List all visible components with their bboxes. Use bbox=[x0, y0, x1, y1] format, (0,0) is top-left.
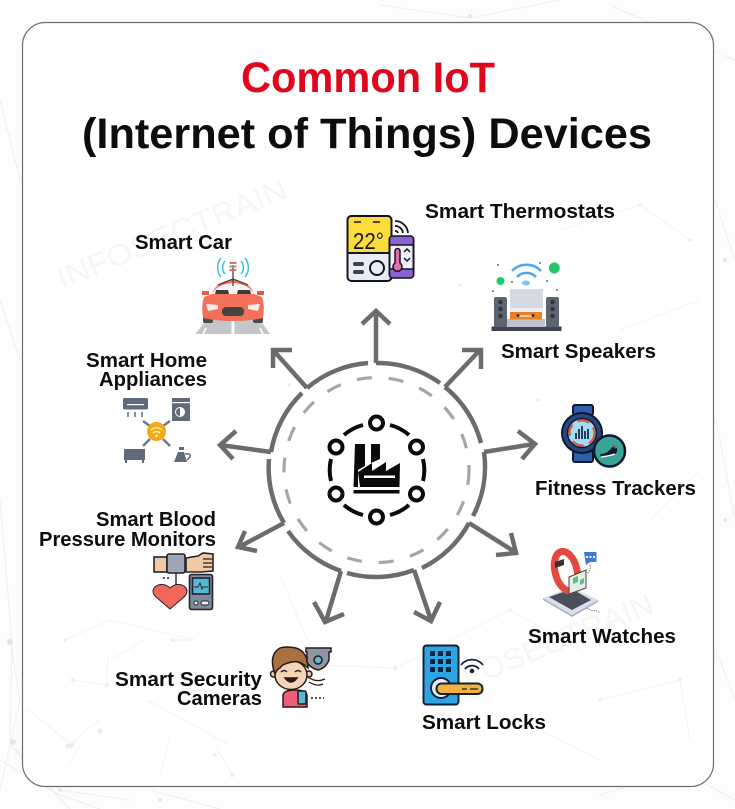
label: Smart Blood Pressure Monitors: Pressure Monitors bbox=[39, 529, 216, 551]
label: Smart Home Appliances: Smart Home bbox=[86, 350, 207, 372]
arrow: lower right bbox=[469, 523, 516, 555]
arrow: up bbox=[362, 311, 390, 363]
label: Smart Blood Pressure Monitors: Smart Blood bbox=[96, 509, 216, 531]
icon: smart car bbox=[196, 258, 270, 334]
label: Smart Car: Smart Car bbox=[135, 232, 232, 254]
label: Smart Security Cameras: Smart Security bbox=[115, 669, 263, 691]
inner dashed ring bbox=[284, 378, 469, 562]
central hub diagram with arrows bbox=[220, 311, 535, 622]
label: Smart Security Cameras: Cameras bbox=[177, 688, 262, 710]
label: Smart Thermostats: Smart Thermostats bbox=[425, 201, 615, 223]
icon: smart security camera person bbox=[270, 647, 331, 707]
watermark: INFOSECTRAIN bbox=[52, 173, 292, 295]
arrow: right bbox=[484, 431, 535, 459]
title: (Internet of Things) Devices bbox=[82, 110, 652, 158]
icon: fitness tracker watch bbox=[562, 405, 625, 466]
icon: smart speakers bbox=[492, 262, 562, 331]
icon: smart blood pressure monitor bbox=[153, 553, 213, 610]
arrow: left bbox=[220, 431, 271, 459]
icon: smart lock bbox=[424, 646, 483, 704]
label: Smart Home Appliances bbox=[86, 350, 207, 391]
icon: smart thermostat bbox=[348, 216, 414, 281]
arrow: lower middle right bbox=[414, 570, 440, 621]
arrow: lower middle left bbox=[314, 571, 344, 622]
icon: factory network bbox=[330, 416, 424, 524]
arrow: upper right bbox=[445, 350, 481, 387]
label: Fitness Trackers: Fitness Trackers bbox=[535, 478, 696, 500]
title bbox=[82, 54, 652, 158]
arrow: lower left bbox=[238, 523, 284, 551]
label: Smart Home Appliances: Appliances bbox=[99, 369, 207, 391]
icon: smart watch bbox=[543, 549, 600, 617]
watermark: INFOSECTRAIN bbox=[428, 588, 659, 706]
faint network background bbox=[26, 204, 700, 777]
label: Smart Watches: Smart Watches bbox=[528, 626, 676, 648]
arrow: upper left bbox=[273, 350, 307, 388]
label: Smart Speakers: Smart Speakers bbox=[501, 341, 656, 363]
title: Common IoT bbox=[241, 54, 495, 102]
label: Smart Locks: Smart Locks bbox=[422, 712, 546, 734]
label: Smart Blood Pressure Monitors bbox=[39, 509, 216, 551]
label: Smart Security Cameras bbox=[115, 669, 263, 710]
icon: smart thermostat: 22° bbox=[353, 228, 384, 254]
icon: smart home appliances bbox=[123, 398, 190, 463]
outer ring segments bbox=[269, 363, 485, 577]
